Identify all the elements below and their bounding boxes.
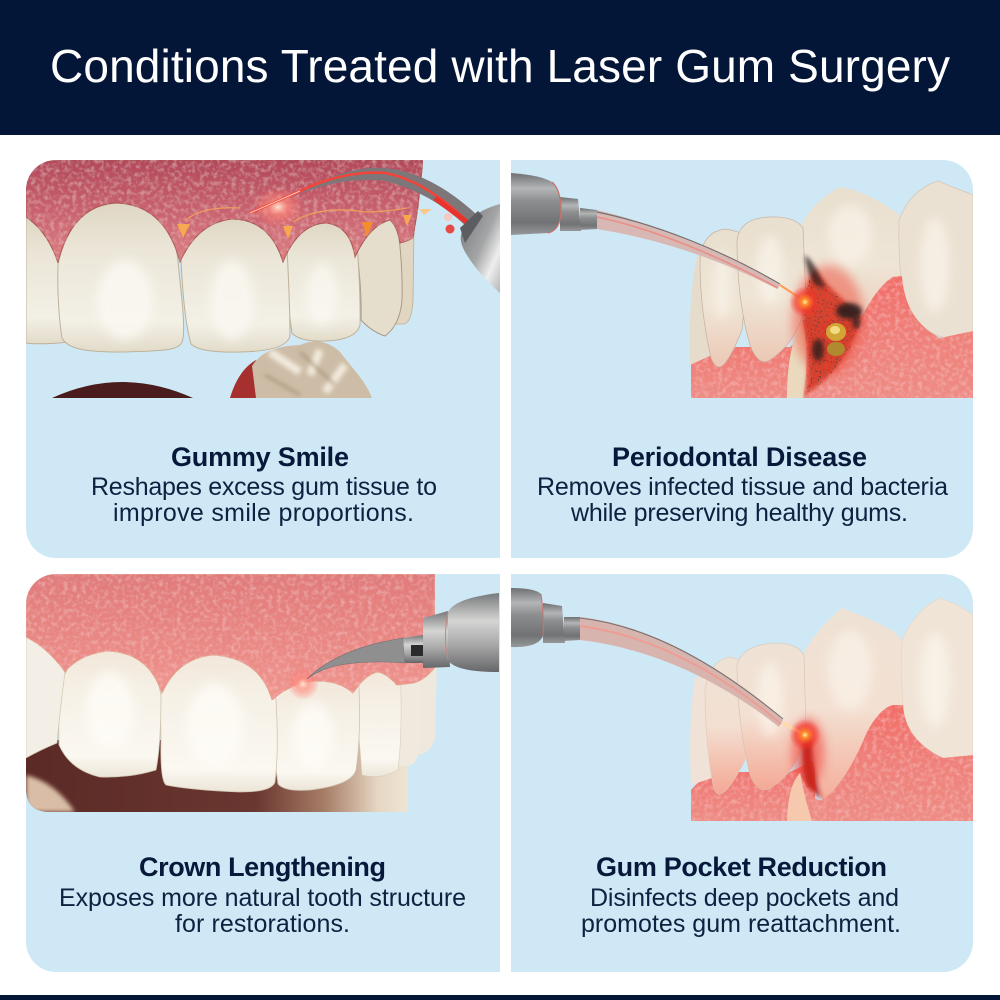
laser spot	[289, 671, 318, 699]
panel: crown lengthening	[26, 574, 500, 972]
orange trim arrows	[177, 209, 432, 239]
description: gummy smile: improve smile proportions.	[113, 499, 414, 527]
description: periodontal disease	[537, 473, 948, 527]
gum tissue	[803, 276, 973, 398]
illustration: gum pocket with laser	[511, 588, 973, 821]
illustration: crown lengthening with laser	[26, 574, 499, 812]
header banner	[0, 0, 1000, 135]
description: gum pocket reduction	[581, 884, 901, 938]
laser handpiece	[511, 588, 821, 751]
description: gummy smile: Reshapes excess gum tissue to	[91, 473, 437, 501]
exposed root	[787, 773, 812, 821]
heading: crown lengthening: Crown Lengthening	[139, 852, 386, 882]
panel: periodontal disease	[511, 160, 973, 558]
heading: gum pocket reduction: Gum Pocket Reduction	[596, 852, 887, 882]
laser handpiece	[511, 173, 821, 318]
description: periodontal disease: while preserving healthy gums.	[570, 499, 908, 527]
description: gum pocket reduction: Disinfects deep pockets and	[590, 884, 899, 912]
panel: gum pocket reduction	[511, 574, 973, 972]
footer strip	[0, 995, 1000, 1000]
pink glow at gum margin	[256, 190, 300, 224]
pocket glow	[792, 718, 824, 786]
dotted trim line	[185, 208, 407, 222]
title: Conditions Treated with Laser Gum Surgery	[50, 40, 950, 92]
panel: gummy smile	[26, 160, 500, 558]
description: crown lengthening: for restorations.	[175, 910, 350, 938]
heading: periodontal disease: Periodontal Disease	[612, 442, 867, 472]
gum tissue	[26, 160, 423, 263]
description: gum pocket reduction: promotes gum reattachment.	[581, 910, 901, 938]
heading: gummy smile: Gummy Smile	[171, 442, 349, 472]
description: periodontal disease: Removes infected tissue and bacteria	[537, 473, 948, 501]
laser handpiece	[307, 593, 499, 679]
illustration: gummy smile with laser	[26, 160, 500, 398]
exposed root	[787, 320, 806, 398]
mouth interior	[26, 740, 408, 812]
laser handpiece	[250, 168, 500, 293]
illustration: infected gums with laser	[511, 173, 973, 398]
description: gummy smile	[91, 473, 437, 527]
gum tissue	[26, 574, 435, 700]
gum tissue	[787, 705, 973, 821]
description: crown lengthening	[59, 884, 466, 938]
description: crown lengthening: Exposes more natural tooth structure	[59, 884, 466, 912]
infection and bacteria	[792, 255, 864, 395]
